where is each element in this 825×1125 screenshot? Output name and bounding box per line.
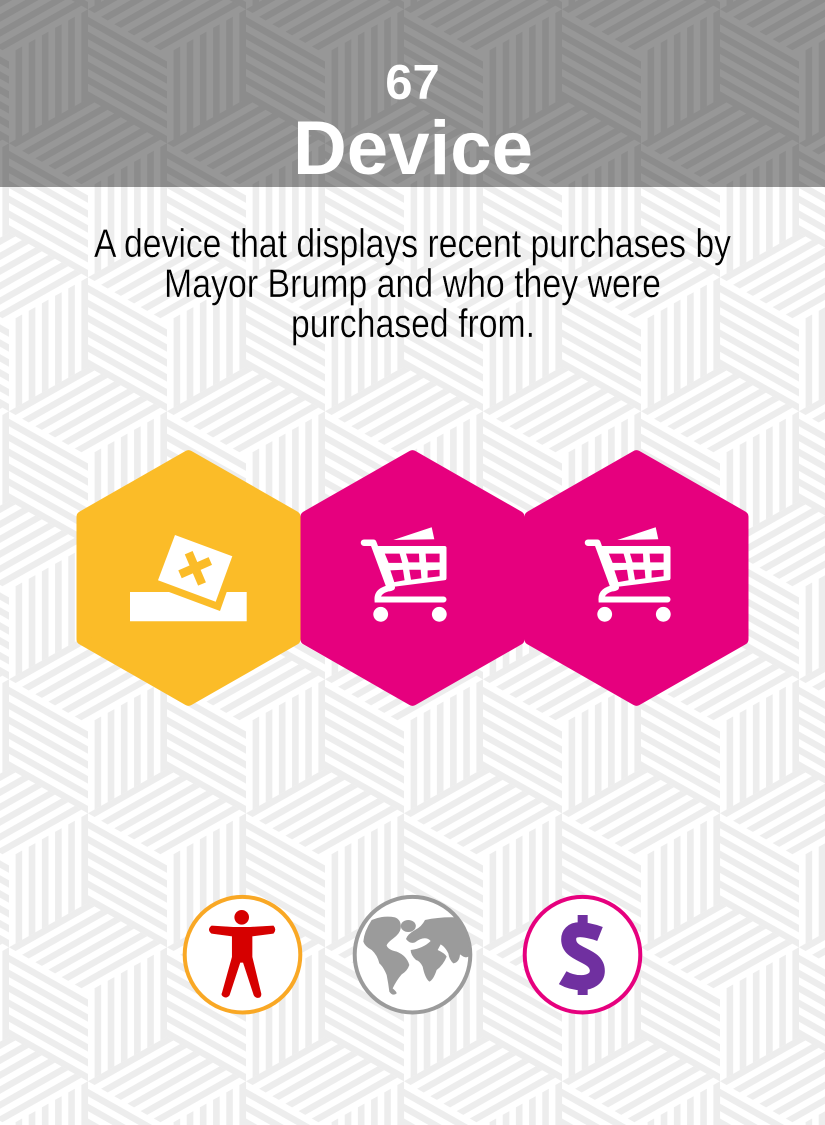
panel: second magenta hexagon with cart icon (530, 456, 742, 700)
icon: shopping cart (588, 527, 671, 622)
icon: globe in grey ring (355, 897, 471, 1012)
icon: shopping cart (364, 527, 447, 622)
panel: yellow hexagon with ballot icon (82, 456, 294, 700)
description text: Mayor Brump and who they were (164, 262, 661, 306)
title: Device (293, 106, 533, 191)
description text: purchased from. (291, 302, 535, 346)
icon: ballot paper in box (130, 535, 247, 621)
header band (0, 0, 825, 187)
panel: magenta hexagon with cart icon (306, 456, 518, 700)
icon: dollar in magenta ring (525, 897, 640, 1012)
card number: 67 (385, 56, 440, 110)
description text (94, 222, 731, 346)
icon: person in orange ring (185, 897, 300, 1012)
